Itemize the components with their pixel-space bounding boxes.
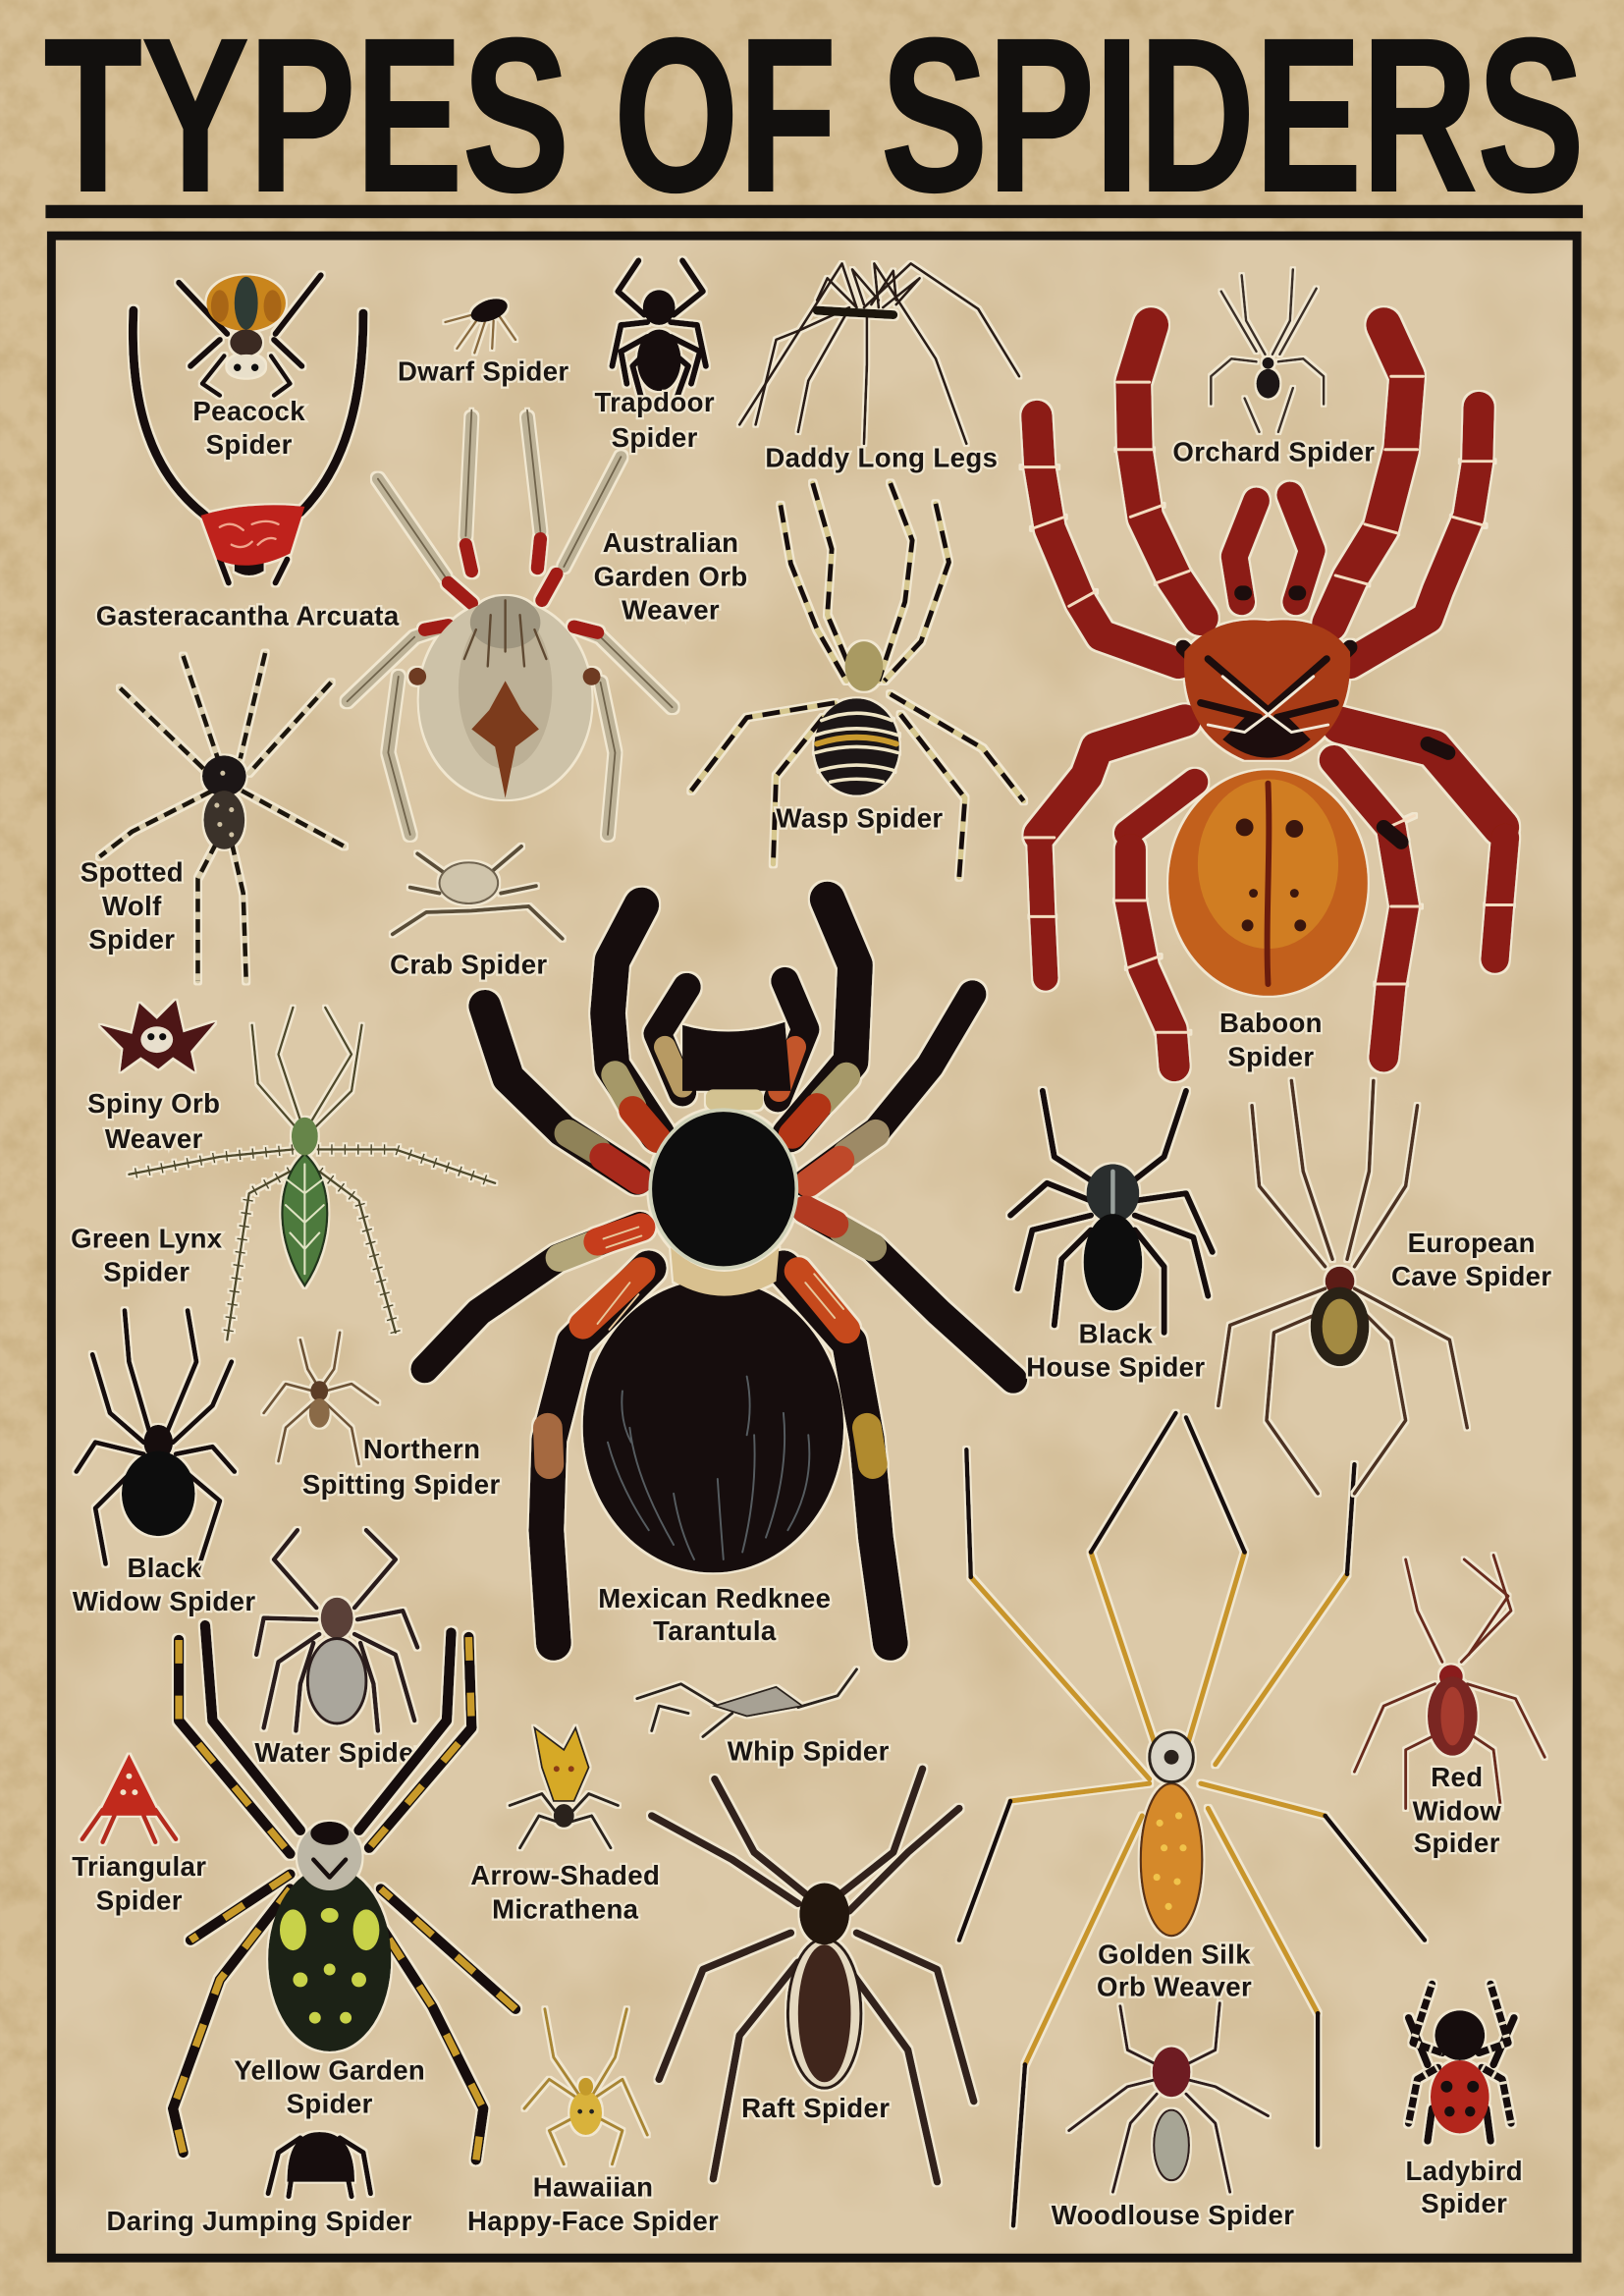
northern spitting label: Northern bbox=[363, 1434, 480, 1464]
spider: raft bbox=[652, 1769, 974, 2182]
raft label: Raft Spider bbox=[741, 2093, 890, 2123]
northern spitting label: Spitting Spider bbox=[302, 1469, 501, 1500]
spotted wolf illustration bbox=[100, 653, 345, 981]
spiny orb weaver label: Spiny Orb bbox=[87, 1088, 220, 1119]
european cave label: European bbox=[1408, 1228, 1536, 1258]
micrathena illustration bbox=[510, 1727, 618, 1848]
spider: trapdoor bbox=[594, 260, 715, 453]
crab label: Crab Spider bbox=[390, 950, 548, 980]
peacock label: Peacock bbox=[192, 396, 305, 426]
spider: black house bbox=[1010, 1091, 1213, 1383]
black widow label: Black bbox=[127, 1553, 201, 1583]
trapdoor illustration bbox=[612, 260, 706, 399]
spider: ladybird bbox=[1406, 1984, 1523, 2218]
spiny orb weaver label: Weaver bbox=[105, 1123, 203, 1154]
tarantula label: Mexican Redknee bbox=[598, 1583, 831, 1613]
trapdoor label: Trapdoor bbox=[594, 387, 715, 417]
tarantula label: Tarantula bbox=[653, 1615, 777, 1646]
wasp illustration bbox=[691, 483, 1023, 877]
gasteracantha label: Gasteracantha Arcuata bbox=[96, 601, 400, 631]
baboon illustration bbox=[1022, 325, 1512, 1066]
triangular label: Triangular bbox=[72, 1851, 206, 1882]
spotted wolf label: Wolf bbox=[102, 891, 162, 921]
whip label: Whip Spider bbox=[728, 1735, 890, 1766]
spider: black widow bbox=[73, 1311, 255, 1616]
spider: golden silk orb weaver bbox=[959, 1413, 1425, 2225]
spider: water bbox=[254, 1530, 425, 1768]
red widow illustration bbox=[1354, 1556, 1544, 1808]
yellow garden label: Yellow Garden bbox=[234, 2054, 425, 2085]
red widow label: Widow bbox=[1413, 1795, 1501, 1826]
spider: northern spitting bbox=[264, 1333, 501, 1500]
daring jumping label: Daring Jumping Spider bbox=[107, 2206, 412, 2236]
spider: green lynx bbox=[71, 1008, 495, 1339]
dwarf label: Dwarf Spider bbox=[398, 356, 569, 387]
baboon label: Baboon bbox=[1219, 1008, 1323, 1038]
spider: dwarf bbox=[398, 295, 569, 387]
hawaiian illustration bbox=[524, 2009, 647, 2164]
micrathena label: Arrow-Shaded bbox=[470, 1860, 660, 1890]
spider: daring jumping bbox=[107, 2132, 412, 2236]
spider: european cave bbox=[1218, 1080, 1551, 1494]
title rule bbox=[45, 205, 1583, 218]
spider: wasp bbox=[691, 483, 1023, 877]
baboon label: Spider bbox=[1227, 1041, 1314, 1071]
yellow garden label: Spider bbox=[287, 2089, 373, 2119]
australian garden orb weaver label: Weaver bbox=[622, 595, 720, 626]
gasteracantha illustration bbox=[133, 310, 363, 582]
triangular illustration bbox=[82, 1754, 176, 1842]
black house label: Black bbox=[1079, 1318, 1153, 1348]
spotted wolf label: Spider bbox=[88, 924, 175, 955]
black house illustration bbox=[1010, 1091, 1213, 1333]
red widow label: Red bbox=[1431, 1762, 1483, 1792]
golden silk label: Orb Weaver bbox=[1097, 1971, 1252, 2001]
woodlouse illustration bbox=[1069, 2003, 1268, 2192]
spider: woodlouse bbox=[1052, 2003, 1294, 2230]
spider: mexican redknee tarantula bbox=[425, 900, 1013, 1646]
micrathena label: Micrathena bbox=[492, 1893, 639, 1924]
spider: spiny orb weaver bbox=[87, 1000, 220, 1154]
orchard illustration bbox=[1211, 269, 1324, 432]
water spider label: Water Spider bbox=[254, 1737, 425, 1768]
peacock label: Spider bbox=[206, 429, 293, 460]
ladybird label: Ladybird bbox=[1406, 2156, 1523, 2186]
european cave label: Cave Spider bbox=[1391, 1261, 1551, 1291]
green lynx illustration bbox=[129, 1008, 495, 1339]
spider: crab bbox=[390, 847, 563, 980]
spotted wolf label: Spotted bbox=[81, 857, 184, 888]
triangular label: Spider bbox=[96, 1885, 183, 1915]
spider: orchard bbox=[1172, 269, 1375, 467]
australian garden orb weaver label: Garden Orb bbox=[594, 561, 748, 591]
spider: yellow garden bbox=[173, 1625, 515, 2159]
spider: daddy long legs bbox=[739, 263, 1019, 473]
orchard label: Orchard Spider bbox=[1172, 437, 1375, 467]
daddy long legs illustration bbox=[739, 263, 1019, 444]
ladybird label: Spider bbox=[1421, 2188, 1507, 2218]
wasp label: Wasp Spider bbox=[776, 802, 944, 833]
black house label: House Spider bbox=[1026, 1352, 1206, 1383]
crab illustration bbox=[393, 847, 563, 939]
spider: hawaiian happy-face bbox=[467, 2009, 719, 2236]
peacock illustration bbox=[179, 275, 321, 396]
green lynx label: Spider bbox=[103, 1257, 189, 1287]
european cave illustration bbox=[1218, 1080, 1467, 1494]
australian garden orb weaver illustration bbox=[348, 410, 673, 835]
woodlouse label: Woodlouse Spider bbox=[1052, 2200, 1294, 2230]
daddy long legs label: Daddy Long Legs bbox=[765, 443, 998, 473]
black widow illustration bbox=[77, 1311, 235, 1569]
spiny orb weaver illustration bbox=[100, 1000, 215, 1071]
spider: baboon bbox=[1022, 325, 1512, 1072]
golden silk label: Golden Silk bbox=[1098, 1940, 1251, 1970]
whip illustration bbox=[637, 1669, 856, 1736]
hawaiian label: Happy-Face Spider bbox=[467, 2206, 719, 2236]
red widow label: Spider bbox=[1414, 1828, 1500, 1858]
australian garden orb weaver label: Australian bbox=[603, 527, 738, 558]
spider: peacock bbox=[179, 275, 321, 460]
spider: red widow bbox=[1354, 1556, 1544, 1858]
raft illustration bbox=[652, 1769, 974, 2182]
spider: australian garden orb weaver bbox=[348, 410, 748, 835]
spider: whip bbox=[637, 1669, 890, 1766]
daring jumping illustration bbox=[268, 2132, 370, 2197]
hawaiian label: Hawaiian bbox=[533, 2172, 653, 2203]
black widow label: Widow Spider bbox=[73, 1586, 255, 1616]
spider: arrow-shaded micrathena bbox=[470, 1727, 660, 1924]
ladybird illustration bbox=[1409, 1984, 1514, 2141]
tarantula illustration bbox=[425, 900, 1013, 1643]
spider: gasteracantha arcuata bbox=[96, 310, 400, 631]
spider: spotted wolf bbox=[81, 653, 345, 981]
green lynx label: Green Lynx bbox=[71, 1223, 223, 1253]
water spider illustration bbox=[256, 1530, 417, 1730]
yellow garden illustration bbox=[173, 1625, 515, 2159]
northern spitting illustration bbox=[264, 1333, 378, 1464]
trapdoor label: Spider bbox=[612, 422, 698, 453]
dwarf illustration bbox=[445, 295, 515, 353]
golden silk illustration bbox=[959, 1413, 1425, 2225]
spider: triangular bbox=[72, 1754, 206, 1915]
